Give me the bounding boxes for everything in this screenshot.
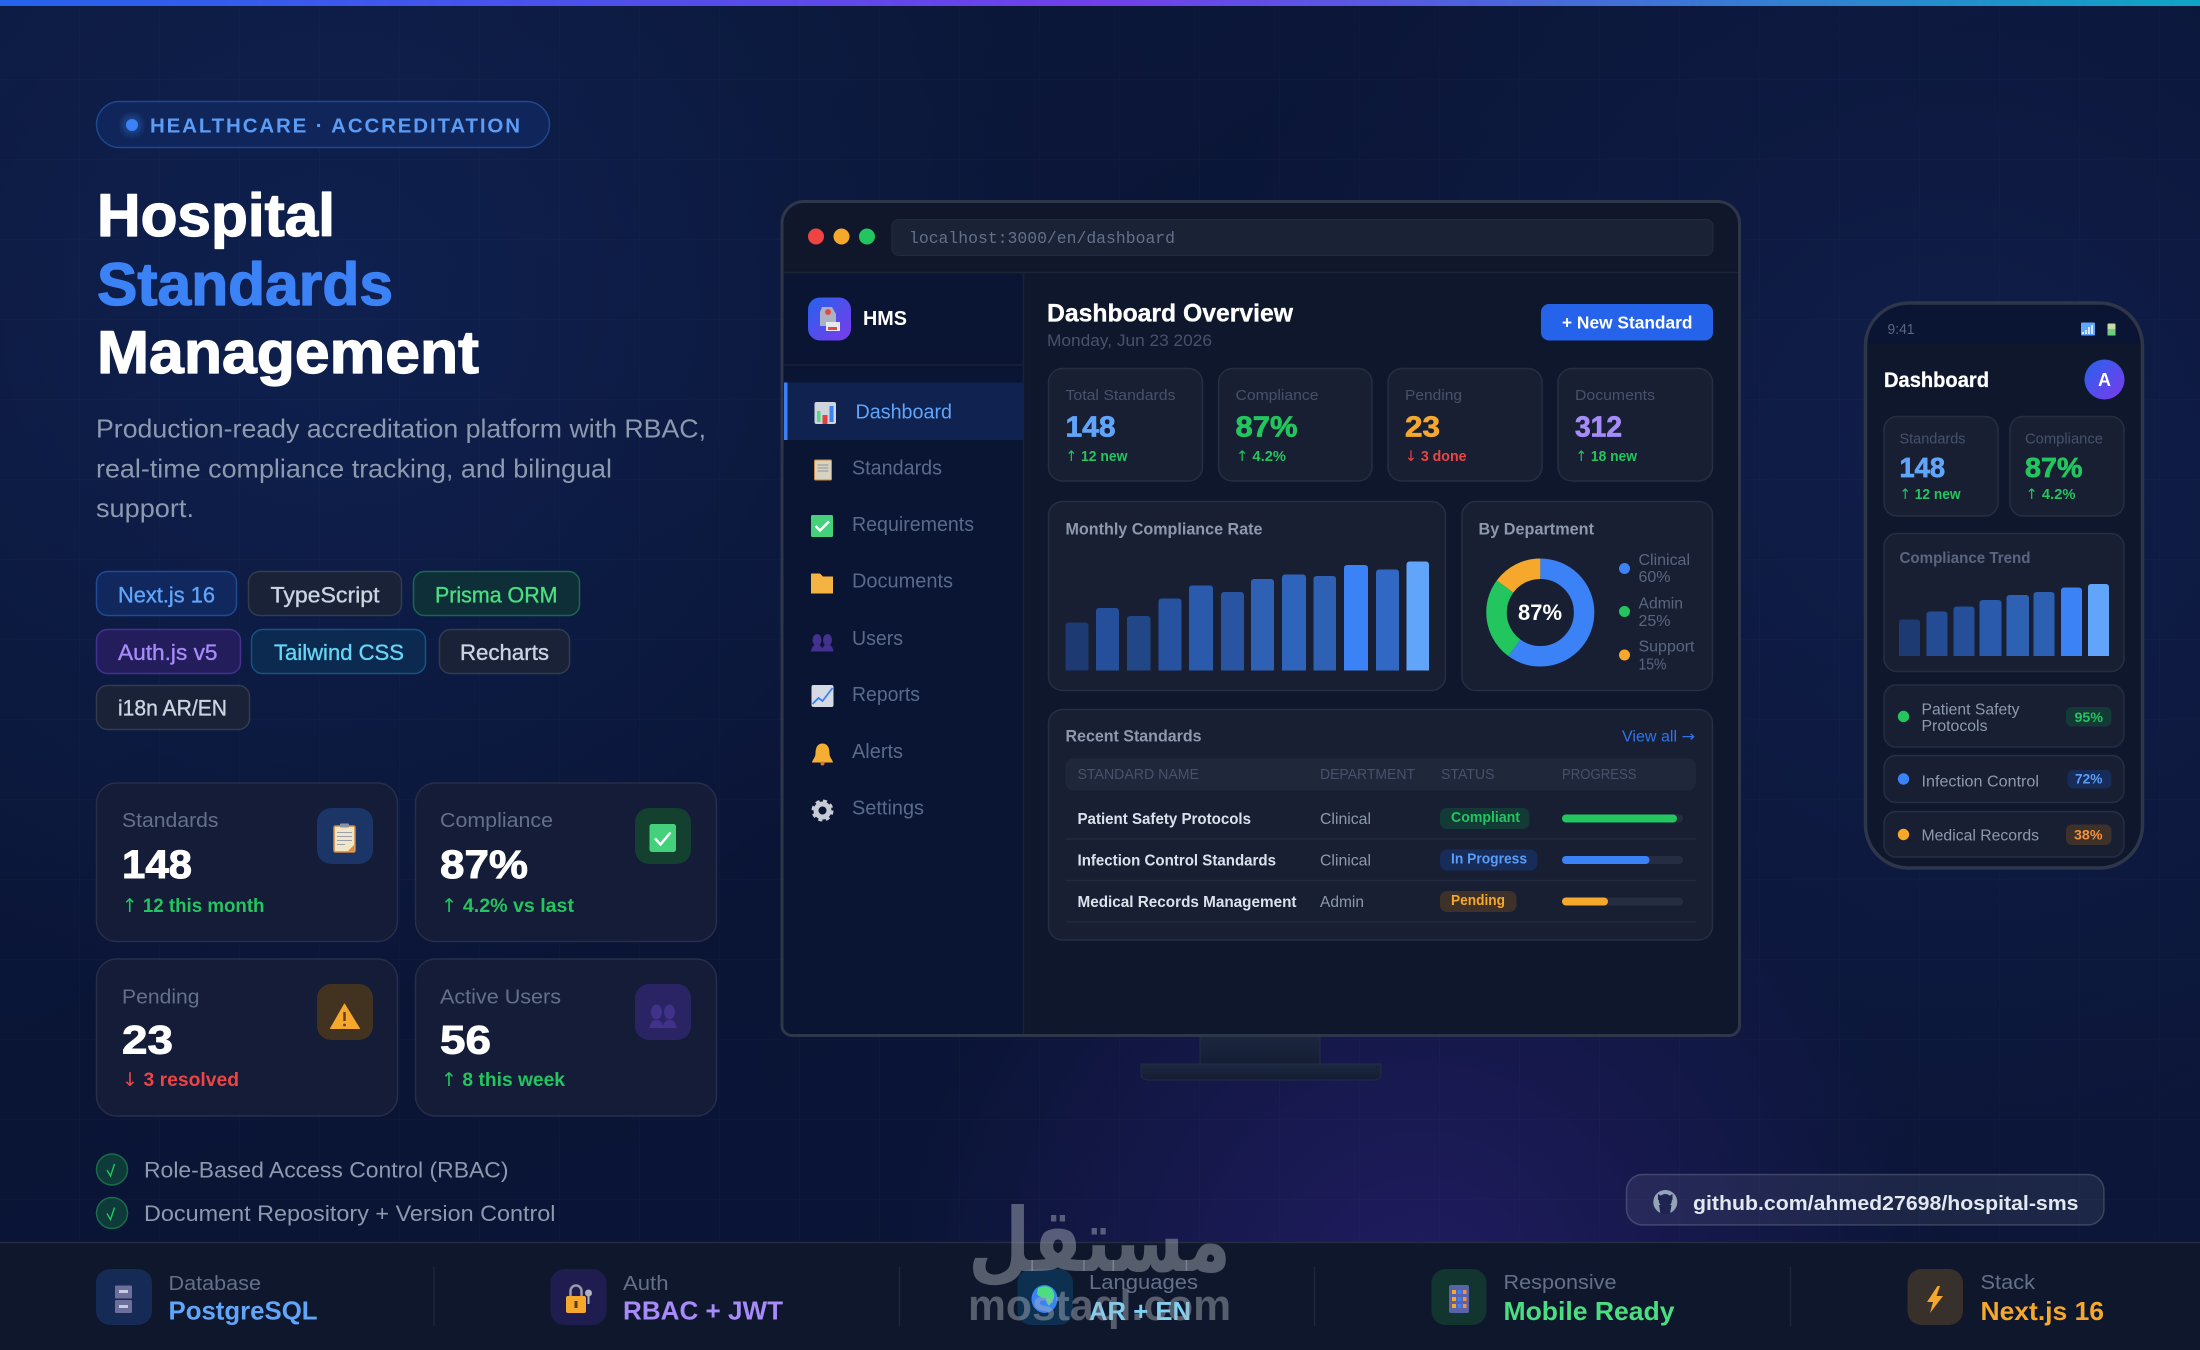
watermark: mostaql: مستقل	[968, 1189, 1231, 1292]
icon: users	[635, 984, 691, 1040]
kpi: compliance: ↑ 4.2%	[1236, 449, 1286, 465]
icon: github	[1653, 1190, 1677, 1214]
donut legend: 60%	[1638, 569, 1670, 586]
description text	[96, 414, 706, 523]
stat card: compliance	[416, 783, 716, 942]
row: medical records: Medical Records Management	[1078, 894, 1297, 911]
watermark: mostaql: mostaql.com	[968, 1281, 1231, 1330]
stat card: compliance: 87%	[440, 843, 528, 887]
phone stat: standards: 148	[1900, 452, 1945, 483]
phone stat: compliance: 87%	[2025, 452, 2083, 483]
button: new standard: + New Standard	[1562, 312, 1692, 332]
technology tags	[96, 572, 580, 730]
bar chart: monthly compliance rate	[1048, 502, 1446, 690]
phone stat: standards: Standards	[1900, 432, 1966, 448]
tag: Recharts: Recharts	[460, 640, 549, 665]
feature: stack: Next.js 16	[1980, 1296, 2104, 1326]
phone stat: standards	[1884, 416, 1998, 516]
table header: DEPARTMENT	[1320, 767, 1415, 783]
feature checklist	[96, 1154, 556, 1228]
feature: documents	[96, 1198, 556, 1228]
description text: support.	[96, 493, 194, 523]
tag: Auth.js	[96, 630, 240, 674]
stat card: pending: Pending	[122, 986, 200, 1008]
icon: lightning bolt	[1927, 1286, 1943, 1313]
phone heading	[1884, 360, 2124, 400]
stat card: standards: 148	[122, 843, 192, 887]
phone stat: compliance: ↑ 4.2%	[2026, 487, 2076, 503]
nav item: documents	[811, 570, 953, 594]
kpi: pending	[1388, 368, 1542, 481]
address bar: localhost:3000/en/dashboard	[909, 229, 1175, 248]
badge: healthcare accreditation: HEALTHCARE · ACCREDITATION	[150, 114, 520, 138]
kpi: pending: ↓ 3 done	[1405, 449, 1466, 465]
watermark: mostaql	[968, 1189, 1231, 1330]
panel: desktop monitor	[782, 202, 1740, 1080]
github link: github.com/ahmed27698/hospital-sms	[1693, 1192, 2078, 1215]
row: medical records	[1066, 891, 1696, 922]
nav item: alerts: Alerts	[852, 741, 903, 763]
tag: Next.js	[96, 572, 236, 616]
tag: TypeScript	[248, 572, 402, 616]
phone list item: infection control: Infection Control	[1922, 774, 2039, 790]
kpi: compliance: 87%	[1236, 412, 1298, 444]
badge: healthcare accreditation	[96, 102, 550, 148]
stat card: active users: Active Users	[440, 986, 561, 1008]
feature: stack	[1908, 1269, 2104, 1326]
tag: i18n: i18n AR/EN	[118, 696, 227, 720]
icon: clipboard	[317, 808, 373, 864]
stat card: pending: 23	[122, 1018, 173, 1062]
feature: responsive	[1432, 1269, 1675, 1326]
row: patient safety: Clinical	[1320, 811, 1371, 828]
phone list item: patient safety: 95%	[2074, 709, 2104, 725]
stat card: compliance: Compliance	[440, 809, 553, 832]
nav item: alerts	[812, 741, 903, 766]
logo: HMS	[863, 308, 907, 330]
row: infection control: Clinical	[1320, 852, 1371, 870]
nav item: reports: Reports	[852, 684, 920, 706]
dashboard heading: Monday, Jun 23 2026	[1047, 332, 1212, 350]
table header: STANDARD NAME	[1078, 767, 1199, 783]
feature: database: PostgreSQL	[168, 1296, 318, 1326]
stat card: standards: Standards	[122, 809, 218, 832]
nav item: dashboard (active): Dashboard	[856, 402, 952, 424]
feature: database	[96, 1269, 318, 1326]
row: patient safety: Patient Safety Protocols	[1078, 811, 1251, 828]
bottom feature bar	[0, 1242, 2200, 1350]
phone list item: patient safety: Protocols	[1922, 718, 1988, 735]
kpi: pending: 23	[1405, 412, 1440, 444]
tag: i18n	[96, 686, 250, 730]
table header: PROGRESS	[1562, 767, 1636, 783]
tag: Tailwind CSS	[252, 630, 426, 674]
nav item: standards: Standards	[852, 458, 942, 480]
row: infection control: In Progress	[1451, 852, 1527, 868]
title: Hospital	[97, 182, 335, 249]
donut legend: Clinical	[1638, 552, 1690, 569]
kpi: documents: ↑ 18 new	[1576, 449, 1638, 465]
icon: check box	[635, 808, 691, 864]
phone list item: patient safety: Patient Safety	[1922, 702, 2020, 718]
tag: Recharts	[440, 630, 570, 674]
phone stat: standards: ↑ 12 new	[1900, 487, 1961, 503]
donut chart: by department: 87%	[1518, 600, 1562, 625]
tag: Next.js: Next.js 16	[118, 582, 215, 608]
feature: auth: RBAC + JWT	[623, 1296, 783, 1326]
phone list item: patient safety	[1884, 685, 2124, 747]
table: recent standards	[1048, 710, 1712, 940]
tag: Auth.js: Auth.js v5	[118, 640, 218, 665]
stat card: active users	[416, 959, 716, 1116]
phone bar chart: compliance trend	[1884, 534, 2124, 672]
donut chart: by department	[1462, 502, 1712, 690]
donut legend: 25%	[1638, 613, 1670, 630]
phone stat: compliance	[2010, 416, 2124, 516]
nav item: users	[811, 628, 903, 652]
kpi: documents: 312	[1575, 412, 1622, 444]
feature: auth	[550, 1269, 783, 1326]
kpi: total standards	[1048, 368, 1202, 481]
nav item: reports	[812, 684, 920, 707]
stat card: compliance: ↑ 4.2% vs last	[441, 895, 575, 917]
table: recent standards: Recent Standards	[1066, 728, 1202, 746]
phone heading: Dashboard	[1884, 369, 1989, 392]
feature: languages: Languages	[1089, 1271, 1198, 1294]
bar chart: monthly compliance rate: Monthly Compliance Rate	[1066, 520, 1262, 538]
donut legend: 15%	[1638, 656, 1666, 674]
phone stat: compliance: Compliance	[2025, 432, 2103, 448]
feature: RBAC: Role-Based Access Control (RBAC)	[144, 1158, 508, 1182]
table header: STATUS	[1441, 767, 1494, 783]
description text: Production-ready accreditation platform with RBAC,	[96, 414, 706, 444]
tag: Tailwind CSS: Tailwind CSS	[274, 640, 404, 665]
feature: languages	[1018, 1269, 1198, 1326]
icon: database	[115, 1286, 132, 1313]
feature: database: Database	[168, 1272, 261, 1295]
stat card: active users: 56	[440, 1018, 491, 1062]
phone status bar: 9:41	[1888, 321, 1914, 338]
kpi: total standards: 148	[1066, 412, 1116, 444]
monitor frame	[782, 202, 1740, 1036]
github link	[1626, 1174, 2104, 1225]
row: medical records: Pending	[1451, 893, 1505, 909]
panel: stat cards	[96, 783, 716, 1116]
row: infection control: Infection Control Standards	[1078, 852, 1276, 870]
donut legend	[1619, 552, 1695, 674]
donut legend: Admin	[1638, 596, 1683, 612]
nav item: users: Users	[852, 628, 903, 650]
stat card: active users: ↑ 8 this week	[441, 1069, 565, 1091]
phone heading: A	[2098, 370, 2111, 390]
icon: warning	[317, 984, 373, 1040]
row: patient safety: Compliant	[1451, 810, 1520, 826]
feature: auth: Auth	[623, 1272, 668, 1295]
feature: responsive: Responsive	[1504, 1271, 1616, 1294]
feature: languages: AR + EN	[1089, 1296, 1191, 1326]
icon: globe	[1032, 1285, 1058, 1313]
button: new standard	[1541, 304, 1713, 340]
kpi: total standards: ↑ 12 new	[1066, 449, 1128, 465]
stat card: pending: ↓ 3 resolved	[122, 1069, 239, 1091]
dashboard heading	[1047, 300, 1294, 350]
nav item: settings	[813, 798, 924, 820]
title: Management	[97, 319, 479, 386]
panel: mobile phone	[1866, 303, 2142, 868]
kpi: total standards: Total Standards	[1066, 387, 1176, 404]
icon: mobile	[1449, 1285, 1469, 1313]
dashboard heading: Dashboard Overview	[1047, 300, 1294, 328]
tag: Prisma ORM: Prisma ORM	[435, 582, 558, 608]
row: medical records: Admin	[1320, 894, 1364, 911]
browser title bar	[784, 203, 1738, 272]
stat card: standards: ↑ 12 this month	[122, 895, 264, 917]
monitor stand	[1141, 1036, 1381, 1080]
nav item: standards	[814, 458, 942, 480]
address bar	[892, 220, 1713, 256]
table: recent standards: View all →	[1622, 728, 1695, 746]
feature: documents: Document Repository + Version Control	[144, 1201, 556, 1226]
phone list item: infection control	[1884, 756, 2124, 802]
row: infection control	[1066, 850, 1696, 880]
kpi: documents	[1558, 368, 1712, 481]
donut legend: Support	[1638, 638, 1695, 656]
kpi: pending: Pending	[1405, 387, 1462, 404]
feature: responsive: Mobile Ready	[1504, 1296, 1675, 1326]
sidebar	[784, 273, 1024, 1034]
title	[97, 182, 479, 386]
phone list item: medical records: Medical Records	[1922, 828, 2039, 844]
kpi: compliance: Compliance	[1236, 387, 1318, 404]
kpi: compliance	[1218, 368, 1372, 481]
table header	[1066, 758, 1696, 790]
phone list item: infection control: 72%	[2075, 770, 2103, 786]
donut chart: by department: By Department	[1478, 520, 1594, 538]
phone status bar	[1868, 305, 2140, 344]
phone bar chart: compliance trend: Compliance Trend	[1900, 550, 2030, 567]
kpi: documents: Documents	[1575, 387, 1655, 404]
nav item: dashboard (active)	[784, 382, 1023, 440]
row: patient safety	[1066, 808, 1696, 839]
nav item: requirements: Requirements	[852, 514, 974, 536]
feature: stack: Stack	[1980, 1271, 2036, 1294]
tag: Prisma ORM	[414, 572, 580, 616]
description text: real-time compliance tracking, and bilingual	[96, 454, 612, 484]
title: Standards	[97, 251, 393, 318]
tag: TypeScript: TypeScript	[270, 582, 380, 608]
nav item: documents: Documents	[852, 570, 953, 592]
logo	[808, 298, 907, 340]
stat card: pending	[96, 959, 398, 1116]
phone list item: medical records	[1884, 812, 2124, 857]
stat card: standards	[96, 783, 398, 942]
nav item: settings: Settings	[852, 798, 924, 820]
phone list item: medical records: 38%	[2074, 826, 2103, 842]
icon: lock	[566, 1286, 592, 1313]
